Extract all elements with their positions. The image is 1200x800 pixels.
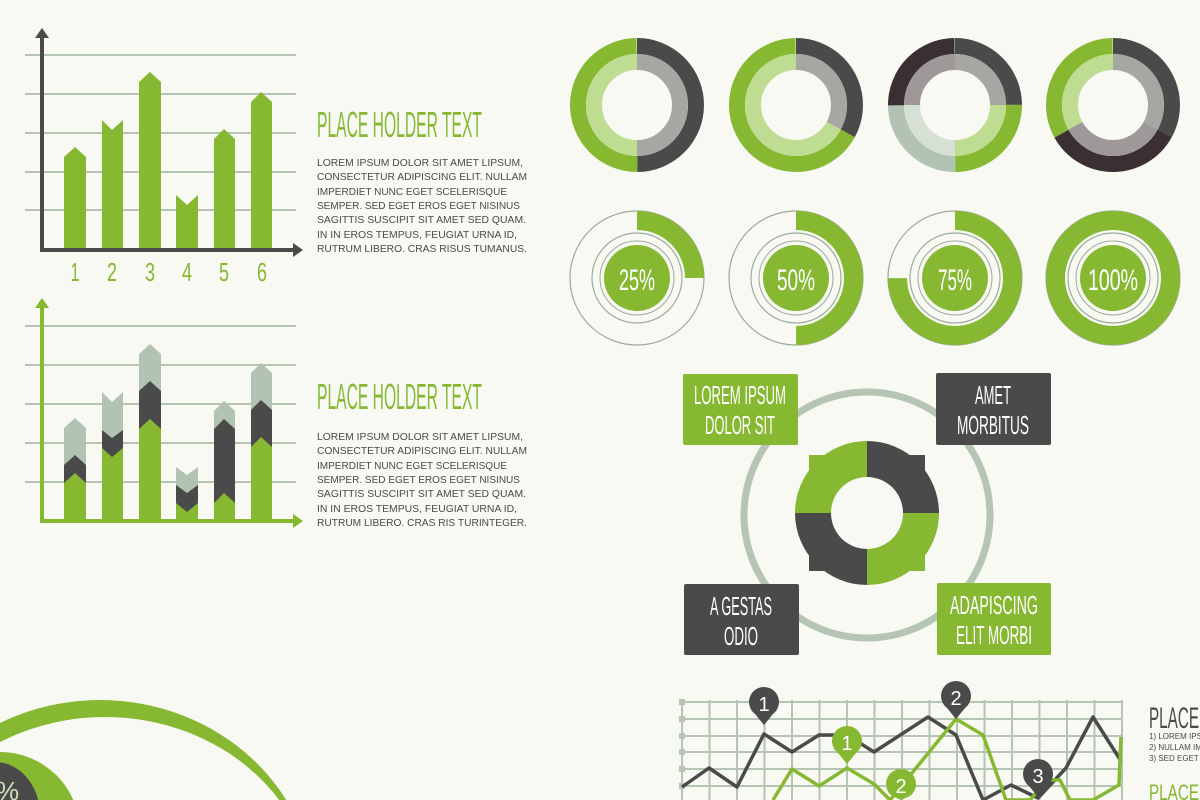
line chart legend text: 3) SED EGET — [1149, 754, 1199, 763]
text block 2: PLACE HOLDER TEXT — [317, 376, 482, 417]
text block 2: SEMPER. SED EGET EROS EGET NISINUS — [317, 474, 520, 486]
line chart legend text — [1149, 702, 1200, 800]
line chart — [679, 681, 1122, 800]
pin dark 2 — [941, 681, 971, 719]
text block 1: IMPERDIET NUNC EGET SCELERISQUE — [317, 186, 507, 198]
donut 4 — [1054, 46, 1172, 164]
box: lorem ipsum: LOREM IPSUM — [694, 380, 786, 410]
pin green 1 — [832, 726, 862, 764]
text block 1: SAGITTIS SUSCIPIT SIT AMET SED QUAM. — [317, 214, 526, 226]
box: amet morbitus: MORBITUS — [957, 410, 1029, 440]
ring 50% — [729, 211, 863, 345]
box: adapiscing elit morbi — [937, 583, 1051, 655]
box: adapiscing elit morbi: ELIT MORBI — [956, 620, 1032, 650]
stacked bar chart 2 — [25, 298, 303, 528]
text block 1: IN IN EROS TEMPUS, FEUGIAT URNA ID, — [317, 229, 517, 241]
text block 1: CONSECTETUR ADIPISCING ELIT. NULLAM — [317, 171, 527, 183]
ring 25%: 25% — [619, 264, 655, 297]
box: a gestas odio: A GESTAS — [710, 591, 772, 621]
bar chart 1: 1 — [70, 257, 80, 287]
text block 2: IMPERDIET NUNC EGET SCELERISQUE — [317, 460, 507, 472]
ring 25% — [570, 211, 704, 345]
box: amet morbitus: AMET — [975, 380, 1011, 410]
text block 1: LOREM IPSUM DOLOR SIT AMET LIPSUM, — [317, 157, 523, 169]
bar chart 1 — [25, 28, 303, 287]
donut 1 — [578, 46, 696, 164]
box: lorem ipsum — [683, 374, 798, 445]
box: amet morbitus — [936, 373, 1051, 445]
pin dark 2: 2 — [950, 688, 962, 710]
ring 75%: 75% — [938, 264, 972, 297]
text block 1 — [317, 104, 527, 255]
donut 3 — [896, 46, 1014, 164]
text block 2: LOREM IPSUM DOLOR SIT AMET LIPSUM, — [317, 431, 523, 443]
ring 100%: 100% — [1088, 264, 1138, 297]
bottom-left arc graphic — [0, 700, 315, 800]
bar chart 1: 6 — [257, 257, 267, 287]
gear donut — [795, 441, 939, 585]
pin dark 3: 3 — [1032, 766, 1044, 788]
bar chart 1: 2 — [107, 257, 117, 287]
pin green 2: 2 — [895, 776, 907, 798]
text block 1: SEMPER. SED EGET EROS EGET NISINUS — [317, 200, 520, 212]
bar chart 1: 4 — [182, 257, 192, 287]
pin dark 1 — [749, 687, 779, 725]
ring 50%: 50% — [777, 264, 815, 297]
pin dark 1: 1 — [758, 694, 770, 716]
ring 75% — [888, 211, 1022, 345]
pin green 2 — [886, 769, 916, 800]
text block 1: PLACE HOLDER TEXT — [317, 104, 482, 145]
green line — [773, 719, 1121, 800]
pin green 1: 1 — [841, 733, 853, 755]
dark line — [682, 717, 1121, 800]
box: a gestas odio: ODIO — [724, 621, 758, 651]
text block 2 — [317, 376, 527, 529]
bar chart 1: 5 — [219, 257, 229, 287]
center cycle diagram — [683, 373, 1051, 655]
donut 2 — [737, 46, 855, 164]
bar chart 1: 3 — [145, 257, 155, 287]
donut row — [578, 46, 1172, 164]
percent rings row — [570, 211, 1180, 345]
text block 2: RUTRUM LIBERO. CRAS RIS TURINTEGER. — [317, 517, 527, 529]
text block 2: CONSECTETUR ADIPISCING ELIT. NULLAM — [317, 445, 527, 457]
text block 2: SAGITTIS SUSCIPIT SIT AMET SED QUAM. — [317, 488, 526, 500]
ring 100% — [1046, 211, 1180, 345]
box: adapiscing elit morbi: ADAPISCING — [950, 590, 1038, 620]
text block 2: IN IN EROS TEMPUS, FEUGIAT URNA ID, — [317, 503, 517, 515]
box: a gestas odio — [684, 584, 799, 655]
text block 1: RUTRUM LIBERO. CRAS RISUS TUMANUS. — [317, 243, 527, 255]
pin dark 3 — [1023, 759, 1053, 797]
box: lorem ipsum: DOLOR SIT — [705, 410, 775, 440]
